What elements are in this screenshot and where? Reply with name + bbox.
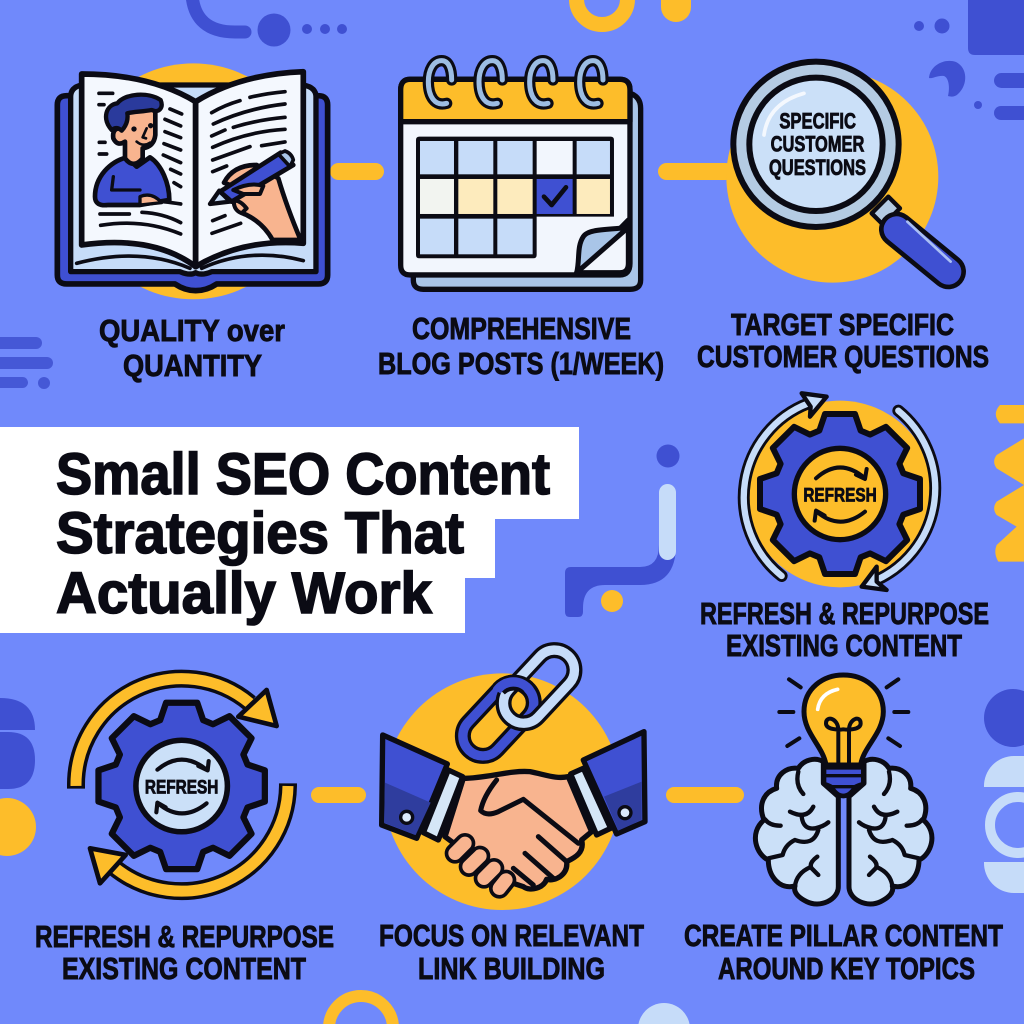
icon: open book with portrait and writing hand: [57, 63, 328, 299]
hands: [445, 771, 592, 889]
decorative shapes: bottom edge: [329, 996, 690, 1024]
label: quality over quantity: QUANTITY: [123, 348, 262, 383]
icon: magnifying glass with question text: QUESTIONS: [769, 155, 866, 180]
left cuff: [382, 735, 447, 838]
connector: gear to handshake: [311, 787, 366, 803]
calendar header: [401, 79, 630, 122]
label: target specific customer questions: TARGET SPECIFIC: [731, 307, 954, 342]
icon: refresh gear on yellow circle: [744, 393, 935, 590]
label: refresh and repurpose right: [700, 596, 989, 663]
decorative shapes: left bars: [0, 337, 53, 389]
left page text lines: [99, 93, 182, 234]
decorative shapes: right edge bottom: [984, 689, 1024, 893]
decorative shapes: centre J: [565, 444, 680, 617]
icon: magnifying glass with question text: CUSTOMER: [771, 132, 864, 157]
icon: magnifying glass with question text: [726, 62, 951, 283]
connector: handshake to brain: [666, 787, 744, 803]
calendar rings: [428, 61, 603, 104]
label: refresh and repurpose left: EXISTING CONTENT: [62, 951, 306, 986]
label: comprehensive blog posts: BLOG POSTS (1/WEEK): [378, 346, 664, 381]
title panel: [0, 427, 579, 633]
label: comprehensive blog posts: [378, 311, 664, 381]
connector: calendar to magnifier: [658, 163, 734, 180]
title text: Actually Work: [56, 561, 433, 626]
decorative shapes: top right: [914, 0, 1024, 120]
portrait: shirt: [95, 157, 169, 205]
calendar grid: [416, 137, 614, 258]
portrait: neck and face: [113, 107, 155, 164]
connector: book to calendar: [330, 163, 384, 180]
title text: Small SEO Content: [56, 442, 550, 507]
label: refresh and repurpose right: EXISTING CONTENT: [726, 628, 962, 663]
icon: wall calendar with checked day: [401, 61, 641, 289]
decorative shapes: right yellow zigzag: [994, 405, 1024, 562]
label: refresh and repurpose left: REFRESH & REPURPOSE: [35, 919, 334, 954]
icon: refresh gear on yellow circle: REFRESH: [803, 485, 877, 507]
right page text lines: [212, 92, 285, 233]
right cuff: [583, 732, 645, 834]
magnifier text: SPECIFIC: [779, 108, 856, 133]
label: focus on relevant link building: [379, 918, 644, 986]
label: focus on relevant link building: FOCUS ON RELEVANT: [379, 918, 644, 953]
label: quality over quantity: [99, 313, 285, 383]
icon: refresh gear with yellow arrows: [76, 679, 288, 891]
icon: handshake with chain link: [382, 642, 645, 910]
icon: light bulb over brain: [755, 675, 932, 904]
icon: refresh gear with yellow arrows: REFRESH: [145, 777, 218, 799]
label: comprehensive blog posts: COMPREHENSIVE: [412, 311, 631, 346]
title text: Strategies That: [56, 501, 464, 566]
label: focus on relevant link building: LINK BUILDING: [418, 951, 605, 986]
label: target specific customer questions: [697, 307, 989, 374]
label: refresh and repurpose left: [35, 919, 334, 986]
calendar page curl: [577, 220, 628, 273]
label: create pillar content: [684, 918, 1003, 986]
decorative shapes: left edge bottom: [0, 698, 36, 856]
writing hand and pencil: [224, 165, 301, 240]
chain link: [455, 642, 583, 764]
brain: [755, 759, 932, 904]
decorative shapes: top edge: [192, 0, 691, 46]
label: quality over quantity: QUALITY over: [99, 313, 285, 348]
title text: [56, 442, 550, 626]
bulb: [779, 675, 908, 796]
